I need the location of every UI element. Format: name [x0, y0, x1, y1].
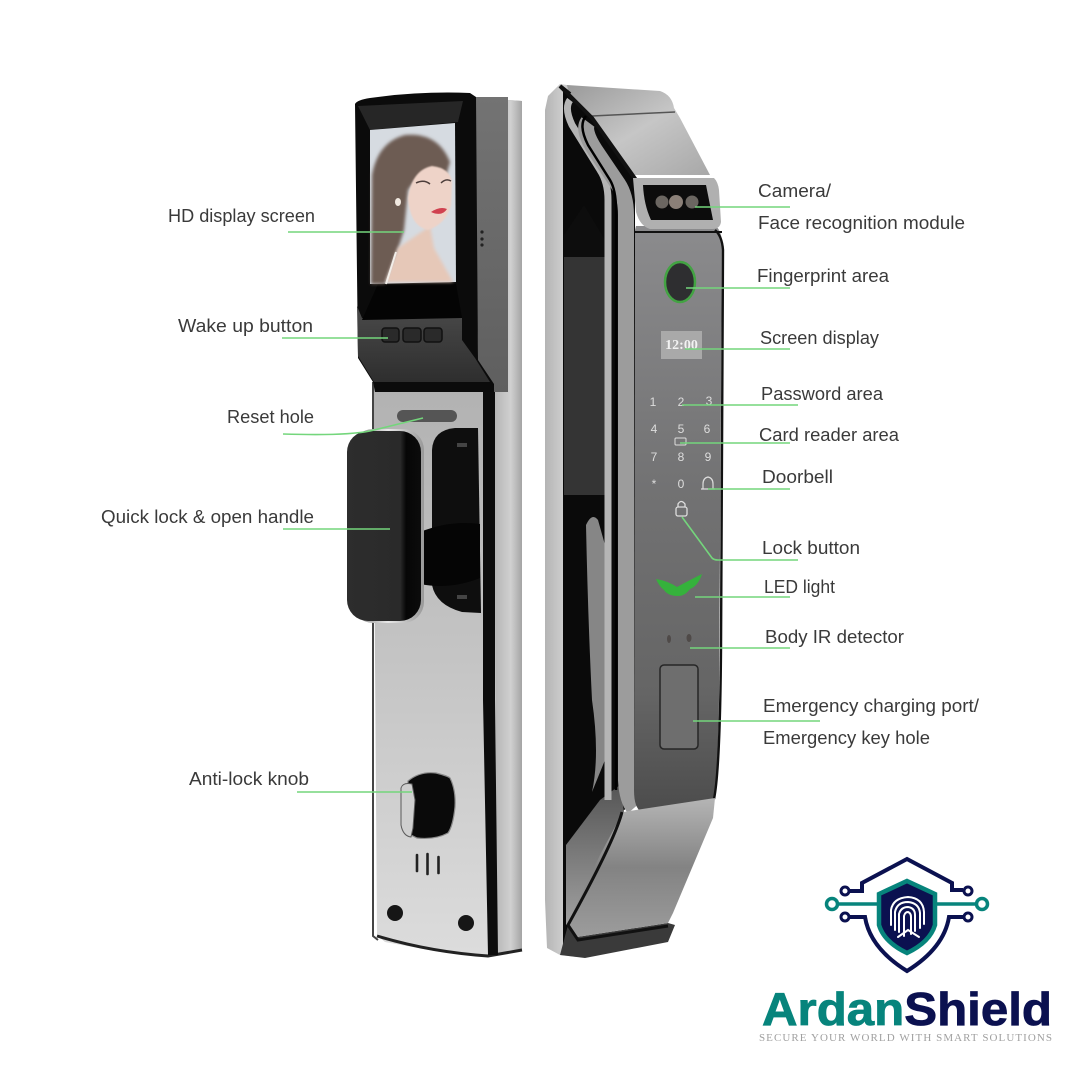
label: quick lock and open handle: Quick lock & open handle [101, 507, 314, 527]
lock button icon [676, 502, 687, 516]
right labels [757, 181, 979, 748]
label: HD display screen: HD display screen [168, 206, 315, 226]
keypad numbers: 8 [678, 450, 685, 464]
rear dark plate [432, 428, 481, 613]
keypad numbers: 6 [704, 422, 711, 436]
label: body IR detector: Body IR detector [765, 627, 904, 647]
camera module [633, 178, 721, 229]
clock display [661, 331, 702, 359]
quick lock handle [347, 429, 424, 623]
three wake buttons [382, 328, 442, 342]
label: doorbell: Doorbell [762, 467, 833, 487]
grey side panel [474, 97, 508, 392]
keypad numbers: 9 [705, 450, 712, 464]
head unit [355, 93, 494, 392]
tagline: SECURE YOUR WORLD WITH SMART SOLUTIONS [759, 1032, 1052, 1044]
reset hole strip [397, 410, 457, 422]
IR detector dots [667, 634, 692, 643]
label: emergency port and key hole [763, 696, 979, 748]
label: camera and face recognition: Camera/ [758, 181, 831, 201]
doorbell icon [701, 477, 715, 489]
label: camera and face recognition [758, 181, 965, 233]
top cap [567, 85, 710, 175]
LED wings [656, 574, 702, 596]
keypad numbers: 5 [678, 422, 685, 436]
card reader icon [675, 438, 686, 445]
keypad numbers: 1 [650, 395, 657, 409]
outer silver strip [545, 84, 578, 957]
label: emergency port and key hole: Emergency key hole [763, 728, 930, 748]
green leader lines [282, 207, 820, 792]
label: LED light: LED light [764, 577, 835, 597]
handle neck [420, 523, 480, 586]
label: reset hole: Reset hole [227, 407, 314, 427]
label: emergency port and key hole: Emergency charging port/ [763, 696, 979, 716]
anti-lock knob [401, 773, 455, 838]
keypad numbers: 4 [651, 422, 658, 436]
silver back plate [373, 100, 522, 956]
dark body reflections [563, 90, 635, 950]
clock display: 12:00 [665, 338, 698, 353]
black vertical stripe [483, 385, 498, 955]
speaker dots [480, 230, 484, 247]
left lock: rear panel [347, 93, 522, 956]
black screen bezel [362, 284, 462, 320]
icon: circuit shield [826, 859, 988, 971]
label: anti-lock knob: Anti-lock knob [189, 769, 309, 789]
label: wake up button: Wake up button [178, 316, 313, 336]
keypad numbers: 0 [678, 477, 685, 491]
label: card reader area: Card reader area [759, 425, 900, 445]
right lock: front panel [545, 84, 723, 958]
wordmark: ArdanShield [762, 983, 1052, 1035]
speaker slots [417, 854, 438, 874]
portrait on screen [370, 123, 456, 284]
label: fingerprint area: Fingerprint area [757, 266, 890, 286]
bottom edge shadow [560, 923, 675, 958]
front keypad face [634, 226, 722, 811]
emergency port cover [660, 665, 698, 749]
left labels [101, 206, 315, 789]
curved silver handle bands [567, 100, 634, 808]
silver foot [568, 798, 715, 937]
keypad numbers: * [652, 477, 657, 491]
label: screen display: Screen display [760, 328, 879, 348]
keypad numbers: 3 [706, 394, 713, 408]
screws [387, 905, 474, 931]
keypad numbers: 2 [678, 395, 685, 409]
keypad numbers [650, 394, 713, 491]
label: password area: Password area [761, 384, 884, 404]
label: lock button: Lock button [762, 538, 860, 558]
ArdanShield logo [759, 859, 1052, 1044]
fingerprint sensor [665, 262, 695, 302]
keypad numbers: 7 [651, 450, 658, 464]
label: camera and face recognition: Face recognition module [758, 213, 965, 233]
